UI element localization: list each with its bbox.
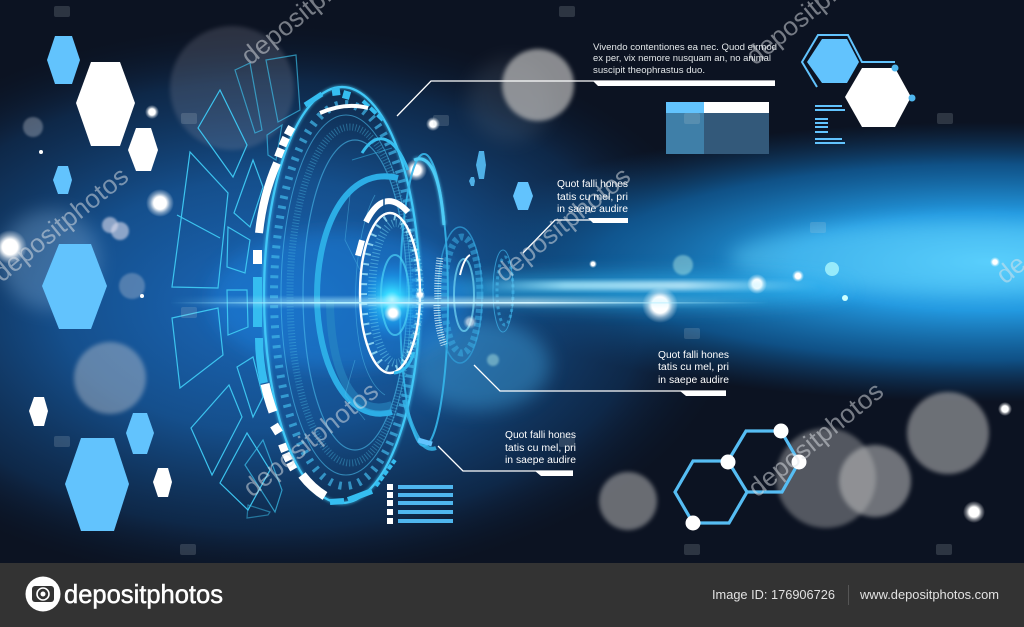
inner thick arc <box>317 176 398 414</box>
callout bars <box>535 81 775 476</box>
text: callout 4: in saepe audire <box>505 455 576 466</box>
list bars <box>387 484 453 524</box>
footer bar <box>0 563 1024 627</box>
watermarks: depositphotos <box>742 376 889 503</box>
segments on main rim <box>305 94 322 105</box>
data table <box>666 102 769 154</box>
text: callout 4: Quot falli hones <box>505 430 576 441</box>
text: callout 2: tatis cu mel, pri <box>557 192 628 203</box>
website: www.depositphotos.com <box>859 587 999 602</box>
small hexagons centre <box>469 151 533 210</box>
text: callout 3: in saepe audire <box>658 375 729 386</box>
text: top paragraph: Vivendo contentiones ea nec. Quod eirmod <box>593 42 777 53</box>
text: callout 4 <box>505 430 576 466</box>
hexagon chain bottom <box>675 424 806 530</box>
text: top paragraph: ex per, vix nemore nusquam an, no animal <box>593 53 771 64</box>
small lens disc <box>437 227 482 363</box>
text: callout 3: Quot falli hones <box>658 350 729 361</box>
inner white ring <box>350 190 434 373</box>
footer logo: depositphotos <box>64 579 223 609</box>
outer segmented ring <box>172 55 300 518</box>
text: callout 2 <box>557 179 628 215</box>
watermarks: depositphotos <box>237 376 384 503</box>
tiny lens disc <box>493 250 513 332</box>
text: top paragraph: suscipit theophrastus duo. <box>593 65 705 76</box>
text: callout 4: tatis cu mel, pri <box>505 443 576 454</box>
main disc <box>253 87 420 503</box>
hexagon pair top right <box>802 35 916 127</box>
text: top paragraph <box>593 42 777 76</box>
image id: Image ID: 176906726 <box>712 587 835 602</box>
text: callout 2: in saepe audire <box>557 204 628 215</box>
text: callout 3: tatis cu mel, pri <box>658 362 729 373</box>
horizontal light beam <box>170 281 820 306</box>
text: callout 3 <box>658 350 729 386</box>
mini bars top right <box>815 105 845 144</box>
callout lines <box>397 81 775 471</box>
camera watermark icons <box>54 6 953 555</box>
hexagons left column <box>29 36 172 531</box>
watermarks: depositphotos <box>489 161 636 288</box>
text: callout 2: Quot falli hones <box>557 179 628 190</box>
bokeh lights <box>0 26 1012 530</box>
footer logo <box>26 576 223 612</box>
white rim pieces <box>253 106 368 496</box>
secondary ring <box>400 154 448 449</box>
